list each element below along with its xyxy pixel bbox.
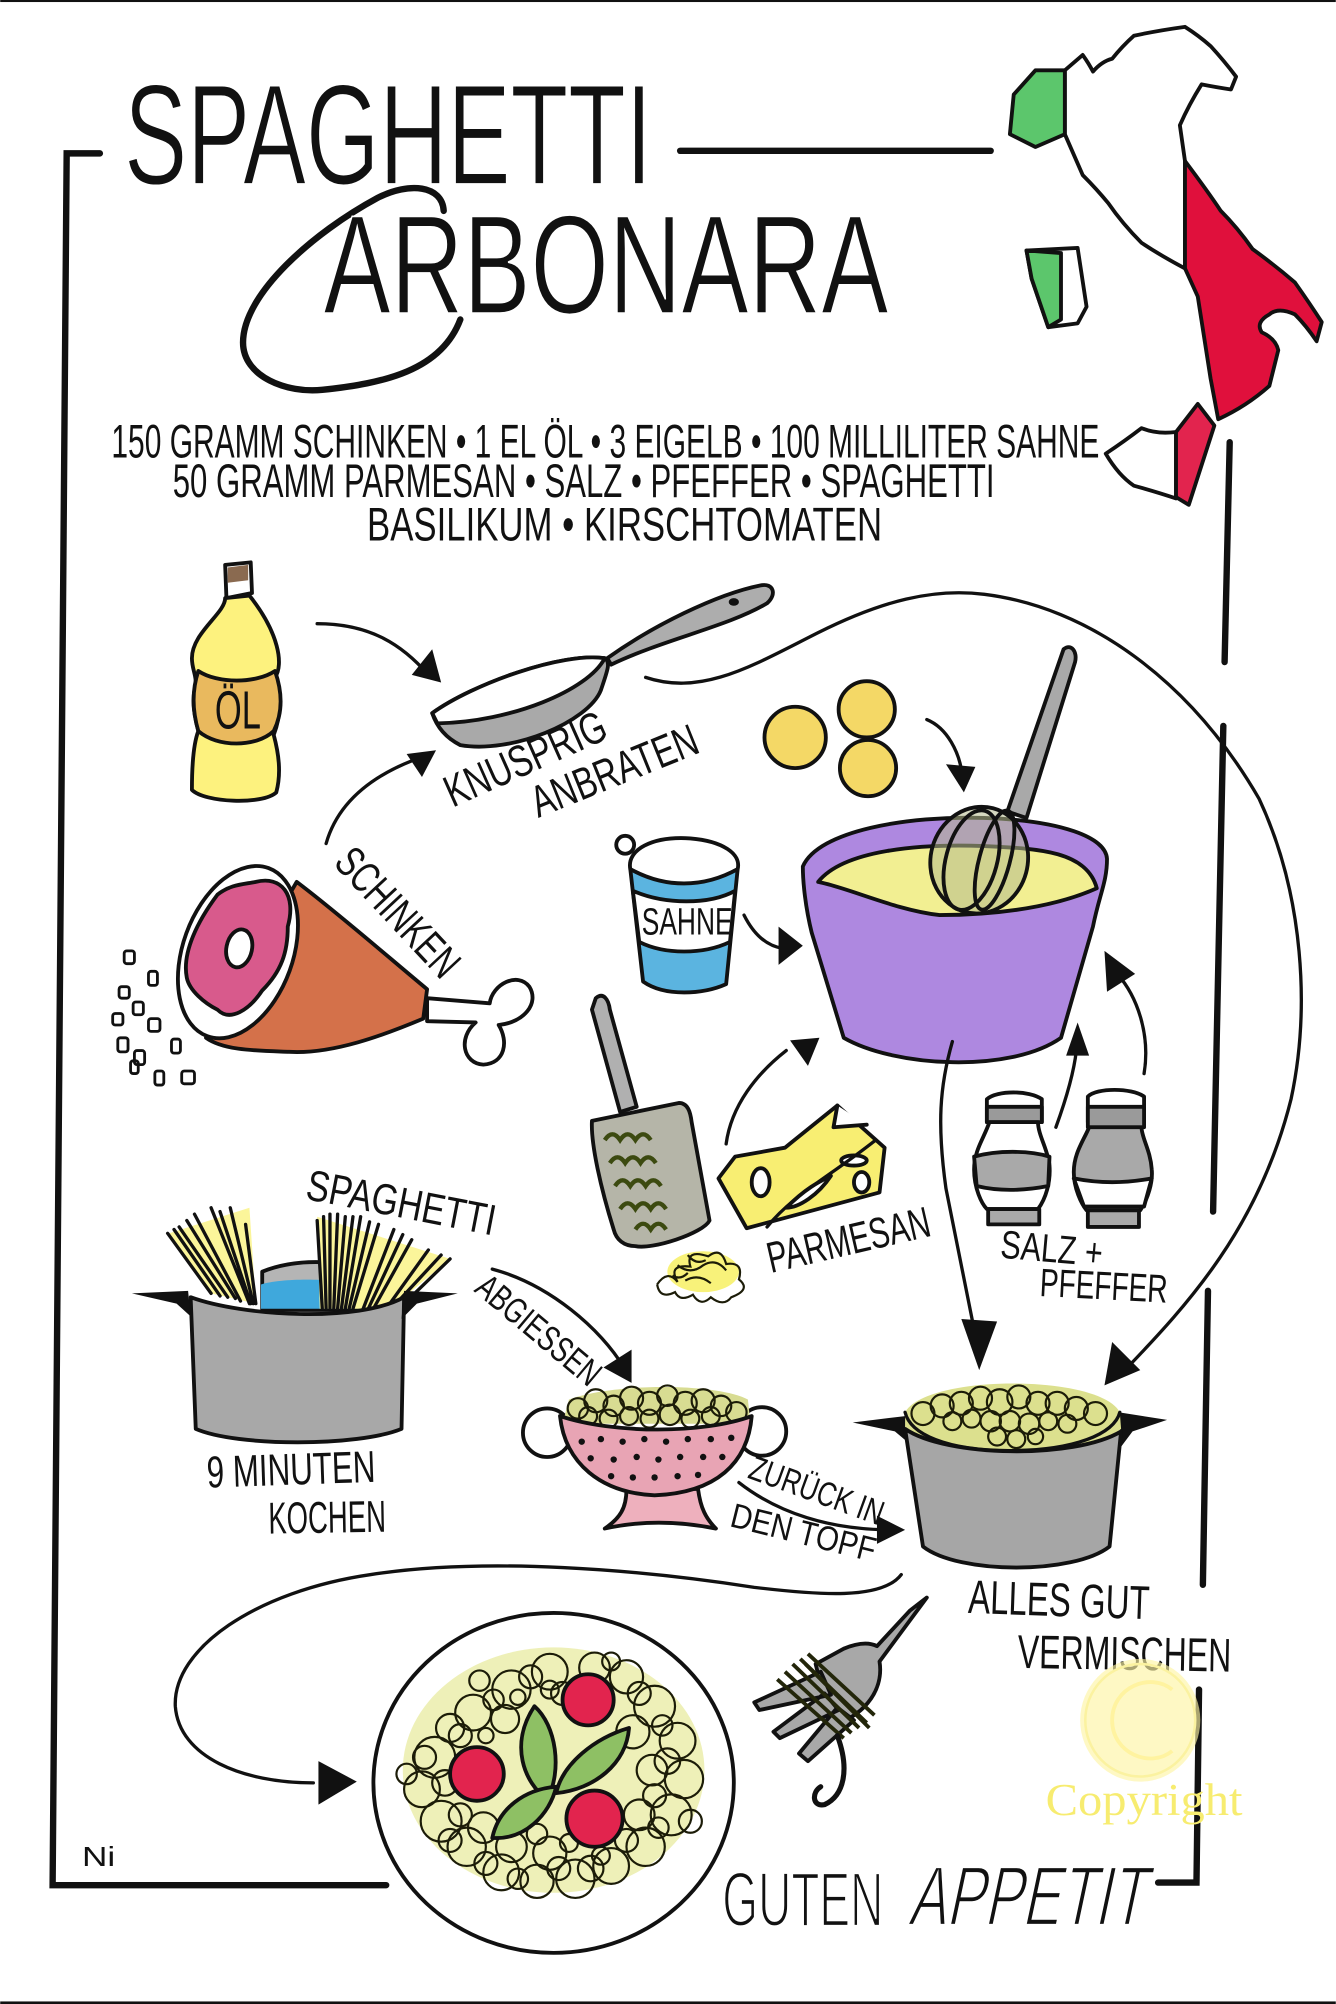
icon: frying pan [432,585,773,747]
label: parmesan: PARMESAN [762,1199,935,1283]
label: alles gut vermischen: VERMISCHEN [1017,1626,1232,1683]
icon: mixing bowl with whisk [803,647,1107,1062]
icon: cream carton [616,836,738,992]
title: ARBONARA [324,186,889,343]
watermark: copyright [1046,1659,1243,1825]
arrow: pan to final pot [646,593,1301,1385]
icon: cooking pot with spaghetti [132,1208,458,1442]
arrow: pepper to bowl [1104,951,1146,1074]
icon: cheese [718,1106,885,1228]
icon: grater [592,996,710,1247]
label: 9 minuten kochen [206,1443,386,1544]
arrow: bowl to final pot [941,1042,997,1370]
icon: oil bottle: ÖL [215,680,261,740]
closing text: guten appetit: APPETIT [904,1850,1160,1944]
label: salz und pfeffer: SALZ + [999,1223,1105,1275]
arrow: salt to bowl [1056,1022,1089,1127]
icon: final pot with pasta [853,1384,1167,1568]
label: alles gut vermischen: ALLES GUT [967,1571,1151,1630]
arrow: eggs to bowl [927,720,975,792]
label: zurück in den topf with arrow: DEN TOPF [727,1497,880,1570]
label: 9 minuten kochen: KOCHEN [268,1493,386,1544]
icon: colander with pasta [523,1385,786,1529]
closing text: guten appetit [722,1850,1160,1944]
icon: oil bottle [192,562,281,801]
arrow: oil to pan [317,624,441,682]
icon: salt shaker [974,1092,1050,1224]
arrow: final pot to plate [175,1566,901,1805]
label: schinken: SCHINKEN [325,838,469,988]
label: knusprig anbraten: ANBRATEN [524,716,706,827]
label: knusprig anbraten [437,702,706,827]
arrow: cheese to bowl [726,1038,819,1144]
label: abgiessen with arrow [468,1266,632,1394]
label: salz und pfeffer [999,1223,1169,1312]
arrow: ham to pan [326,750,436,844]
title [124,55,889,390]
label: zurück in den topf with arrow: ZURÜCK IN [744,1449,889,1533]
icon: ham [156,849,533,1065]
ingredients list: BASILIKUM • KIRSCHTOMATEN [367,499,882,552]
label: abgiessen with arrow: ABGIESSEN [468,1266,609,1394]
icon: fork with spaghetti [754,1598,927,1805]
watermark: copyright: Copyright [1046,1774,1243,1825]
label: 9 minuten kochen: 9 MINUTEN [206,1443,376,1498]
label: salz und pfeffer: PFEFFER [1039,1261,1169,1312]
label: zurück in den topf with arrow [727,1449,905,1570]
icon: plate with carbonara [373,1613,734,1953]
closing text: guten appetit: GUTEN [722,1858,883,1943]
icon: pepper shaker [1074,1090,1152,1227]
icon: egg yolks [764,681,896,796]
label: knusprig anbraten: KNUSPRIG [437,702,614,817]
icon: pepper grains [113,951,194,1085]
label: alles gut vermischen [967,1571,1232,1683]
label: spaghetti: SPAGHETTI [302,1162,500,1245]
icon: cream carton: SAHNE [642,900,733,943]
ingredients list [111,416,1099,552]
signature: Ni [82,1841,115,1872]
icon: italy map [1010,27,1322,505]
icon: shredded parmesan [657,1251,744,1302]
arrow: cream to bowl [744,915,803,965]
title: SPAGHETTI [124,55,652,215]
